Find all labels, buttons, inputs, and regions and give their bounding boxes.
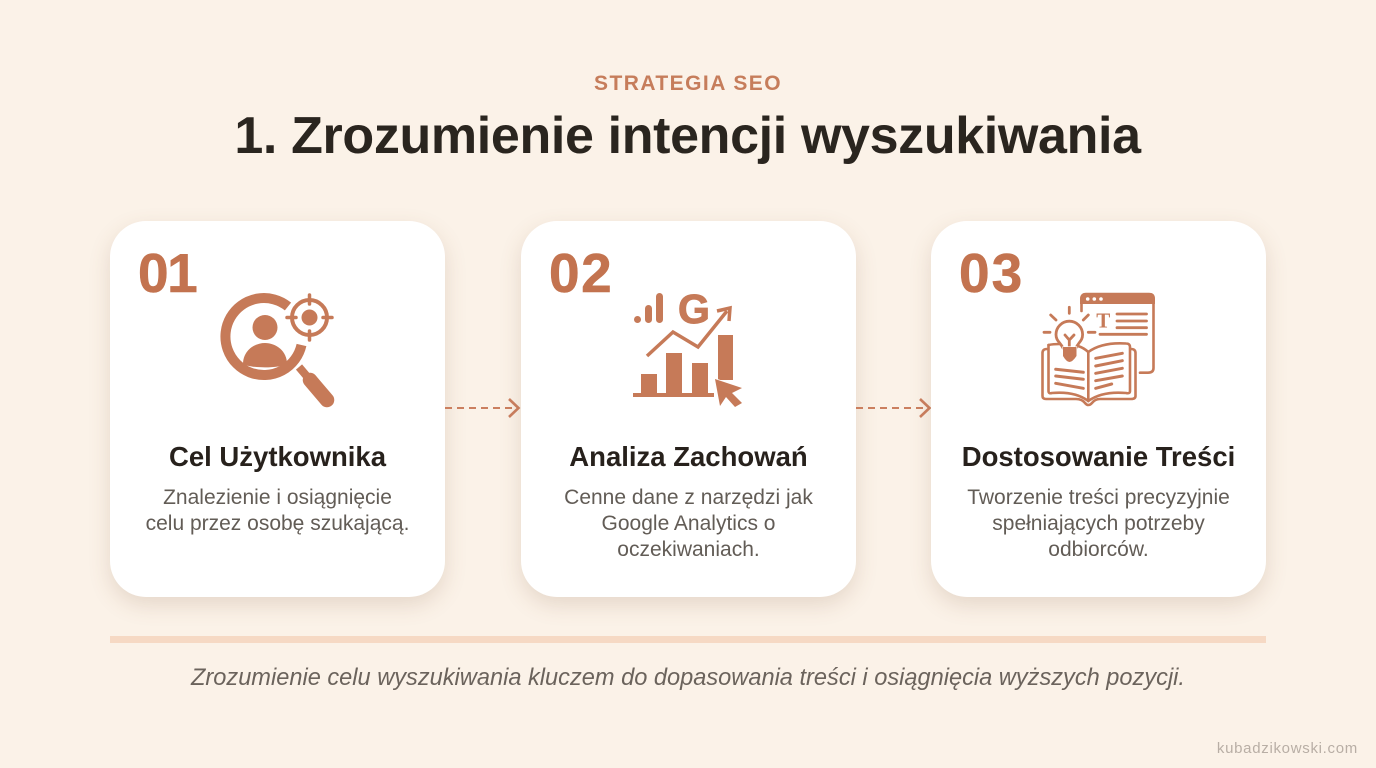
description: celu przez osobę szukającą. bbox=[146, 512, 409, 535]
number 01: 01 bbox=[138, 242, 196, 304]
icon: analytics chart with G and cursor bbox=[633, 286, 742, 407]
arrow 2 to 3 bbox=[856, 398, 931, 418]
heading: Analiza Zachowań bbox=[569, 441, 808, 472]
description: Google Analytics o bbox=[602, 512, 775, 535]
description: Cenne dane z narzędzi jak bbox=[564, 486, 813, 509]
description: spełniających potrzeby bbox=[992, 512, 1205, 535]
heading: Dostosowanie Treści bbox=[962, 441, 1235, 472]
takeaway sentence: Zrozumienie celu wyszukiwania kluczem do dopasowania treści i osiągnięcia wyższych pozycji. bbox=[191, 665, 1185, 691]
icon: magnifier with user and target bbox=[220, 293, 334, 408]
panel: card 1 user goal bbox=[110, 221, 445, 597]
eyebrow label: STRATEGIA SEO bbox=[594, 72, 782, 95]
number 03: 03 bbox=[959, 242, 1024, 304]
icon: open book, light bulb and browser window bbox=[1041, 292, 1155, 406]
description: Znalezienie i osiągnięcie bbox=[163, 486, 392, 509]
description bbox=[564, 486, 813, 561]
title: 1. Zrozumienie intencji wyszukiwania bbox=[234, 107, 1141, 165]
icon: analytics chart with G and cursor: G bbox=[678, 286, 710, 332]
heading: Cel Użytkownika bbox=[169, 441, 386, 472]
arrow 1 to 2 bbox=[445, 398, 520, 418]
panel: card 3 content tailoring bbox=[931, 221, 1266, 597]
footer credit: kubadzikowski.com bbox=[1217, 740, 1358, 757]
divider bar bbox=[110, 636, 1266, 643]
description bbox=[967, 486, 1230, 561]
description: Tworzenie treści precyzyjnie bbox=[967, 486, 1230, 509]
description: oczekiwaniach. bbox=[617, 538, 760, 561]
description: odbiorców. bbox=[1048, 538, 1149, 561]
description bbox=[146, 486, 409, 535]
icon: open book, light bulb and browser window: T bbox=[1096, 308, 1110, 332]
number 02: 02 bbox=[549, 242, 613, 304]
panel: card 2 behaviour analysis bbox=[521, 221, 856, 597]
